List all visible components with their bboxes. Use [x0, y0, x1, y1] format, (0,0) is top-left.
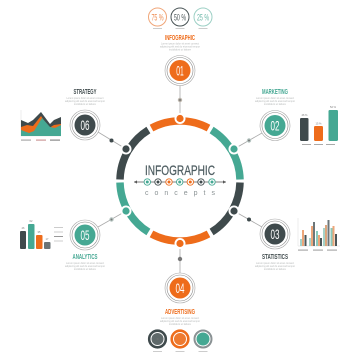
block: analytics: Lorem ipsum dolor sit amet consect [66, 261, 104, 265]
node 01 [165, 56, 195, 86]
bar chart: marketing [300, 105, 338, 145]
block: marketing: incididunt ut labore [264, 102, 287, 106]
ring segment upper left dark [120, 130, 148, 180]
node 01: 01 [176, 62, 184, 78]
block: infographic: adipiscing elit sed do eiusmod tempor [160, 44, 200, 48]
gauge orange [172, 331, 188, 352]
block: analytics: incididunt ut labore [74, 267, 97, 271]
bar chart: analytics: 35 [38, 230, 41, 234]
bar chart: statistics [298, 218, 340, 251]
ring segment right teal [212, 130, 240, 180]
block: strategy: Lorem ipsum dolor sit amet consect [66, 96, 104, 100]
connector: 03 [228, 206, 262, 227]
central title: INFOGRAPHIC [145, 162, 215, 178]
block: strategy: adipiscing elit sed do eiusmod tempor [65, 99, 105, 103]
gauges top [148, 8, 212, 29]
block: advertising: ADVERTISING [165, 309, 195, 316]
block: infographic [160, 35, 200, 52]
bar chart: analytics: 46 [22, 226, 25, 230]
block: strategy: incididunt ut labore [74, 102, 97, 106]
ring segment bottom orange [152, 234, 208, 241]
block: infographic: incididunt ut labore [169, 48, 192, 52]
connector: 02 [228, 133, 262, 154]
block: advertising [160, 309, 200, 326]
block: strategy: STRATEGY [74, 89, 97, 96]
connector: 05 [98, 206, 132, 227]
gauge 50%: 50 % [174, 12, 186, 24]
node 05: 05 [80, 227, 90, 243]
node 02: 02 [270, 118, 280, 134]
bar chart: analytics: 17 [46, 237, 49, 241]
block: statistics: adipiscing elit sed do eiusmod tempor [255, 264, 295, 268]
block: marketing: adipiscing elit sed do eiusmod tempor [255, 99, 295, 103]
block: strategy [65, 89, 105, 106]
bar chart: marketing: 46 % [302, 113, 308, 117]
bar chart: analytics [20, 219, 63, 249]
bar chart: marketing: 15 % [316, 122, 322, 126]
gauge dark: % [156, 337, 159, 341]
gauge teal [194, 330, 212, 352]
block: advertising: incididunt ut labore [169, 322, 192, 326]
node 05 [70, 220, 100, 250]
connector: 06 [98, 132, 132, 154]
ring segment top orange [152, 121, 208, 128]
node 06 [70, 110, 100, 140]
block: advertising: adipiscing elit sed do eiusmod tempor [160, 319, 200, 323]
bar chart: marketing: 52 % [330, 105, 337, 109]
ring segment lower left teal [120, 182, 148, 232]
node 06: 06 [80, 117, 90, 133]
block: analytics: ANALYTICS [72, 254, 98, 261]
block: statistics [255, 254, 295, 271]
block: marketing: Lorem ipsum dolor sit amet consect [256, 96, 294, 100]
gauges bottom [149, 330, 212, 352]
block: analytics: adipiscing elit sed do eiusmod tempor [65, 264, 105, 268]
area chart [21, 110, 61, 141]
central subtitle: concepts [145, 190, 216, 197]
node 04 [165, 273, 195, 303]
block: analytics [65, 254, 105, 271]
gauge 25%: 25 % [197, 12, 209, 24]
node 04: 04 [176, 280, 185, 296]
connector: 04 [174, 238, 186, 274]
ring segment lower right dark [212, 182, 240, 232]
block: marketing [255, 89, 295, 106]
gauge 75%: 75 % [152, 12, 164, 24]
connector: 01 [174, 85, 186, 124]
block: statistics: STATISTICS [262, 254, 288, 261]
bead divider [134, 179, 226, 185]
block: statistics: incididunt ut labore [264, 267, 287, 271]
node 03 [260, 219, 290, 249]
panel: central ring [120, 121, 240, 241]
block: infographic: INFOGRAPHIC [165, 35, 195, 42]
node 03: 03 [270, 226, 280, 242]
block: marketing: MARKETING [262, 89, 288, 96]
block: statistics: Lorem ipsum dolor sit amet consect [256, 261, 294, 265]
block: advertising: Lorem ipsum dolor sit amet consect [161, 316, 199, 320]
node 02 [260, 110, 290, 140]
bar chart: analytics: 62 [30, 219, 33, 223]
block: infographic: Lorem ipsum dolor sit amet consect [161, 42, 199, 46]
